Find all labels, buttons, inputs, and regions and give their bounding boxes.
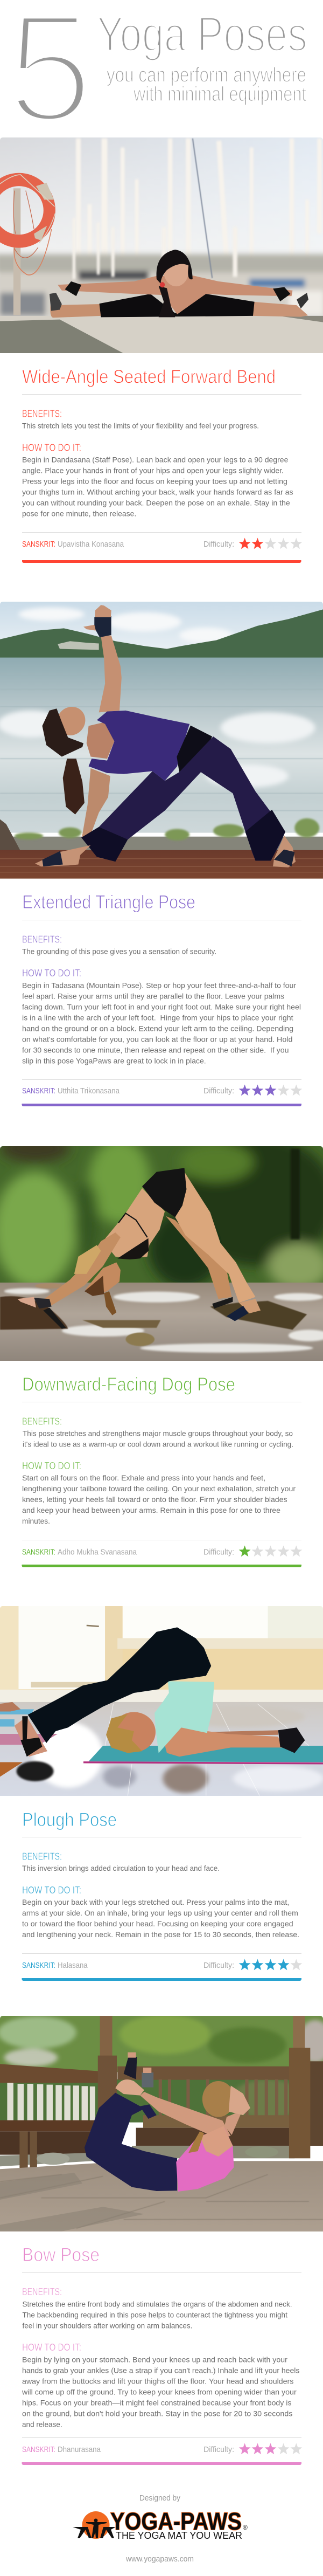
panel: downward-facing dog pose <box>0 1135 323 1567</box>
sanskrit name: Halasana <box>58 1961 88 1970</box>
pose title: Bow Pose <box>22 2244 100 2265</box>
yoga mats <box>0 1709 323 1776</box>
how to do it: and keep your head between your arms. Remain in this pose for one to three <box>22 1506 280 1514</box>
sanskrit name <box>22 2446 101 2454</box>
pose title: Wide-Angle Seated Forward Bend <box>22 367 276 388</box>
panel: plough pose <box>0 1603 323 1981</box>
railing left <box>0 2064 99 2170</box>
difficulty rating <box>203 538 302 549</box>
sanskrit name <box>22 1548 137 1556</box>
how to do it: for 30 seconds to one minute, then release and repeat on the other side. If you <box>22 1045 289 1054</box>
sanskrit name <box>22 1087 120 1096</box>
benefits <box>22 2286 292 2330</box>
benefits: it's ideal to use as a warm-up or cool down around a workout like running or cycling. <box>23 1439 293 1448</box>
sanskrit name: Utthita Trikonasana <box>58 1087 120 1096</box>
woman <box>85 2052 250 2192</box>
how to do it: Begin in Dandasana (Staff Pose). Lean back and open your legs to a 90 degree <box>22 455 289 464</box>
difficulty rating: Difficulty: <box>203 540 234 549</box>
woman <box>35 605 296 867</box>
subtitle <box>107 64 306 106</box>
how to do it: angle. Place your hands in front of your hips and open your legs slightly wider. <box>22 466 284 474</box>
how to do it: Begin on your back with your legs stretched out. Press your palms into the mat, <box>22 1898 289 1906</box>
hills <box>0 609 323 659</box>
benefits <box>22 1416 293 1448</box>
how to do it: Begin by lying on your stomach. Bend your knees up and reach back with your <box>22 2355 287 2364</box>
woman <box>50 250 308 318</box>
sanskrit name <box>22 540 124 549</box>
designed by: Designed by <box>139 2494 181 2503</box>
benefits <box>22 934 216 955</box>
sanskrit name: SANSKRIT: <box>22 1548 55 1556</box>
benefits: This inversion brings added circulation to your head and face. <box>22 1864 220 1872</box>
photo: downward dog in a river <box>0 1135 323 1361</box>
how to do it: HOW TO DO IT: <box>22 2342 81 2353</box>
photo: triangle pose by the sea <box>0 601 323 879</box>
logo: Yoga-Paws: ® <box>243 2524 248 2531</box>
how to do it <box>22 2342 299 2428</box>
benefits: This pose stretches and strengthens major muscle groups throughout your body, so <box>23 1429 293 1437</box>
how to do it: lengthening your tailbone toward the ceiling. On your next exhalation, stretch your <box>22 1484 296 1493</box>
background behind railing <box>0 2079 323 2123</box>
benefits: BENEFITS: <box>22 408 62 419</box>
railing right <box>117 2061 323 2158</box>
how to do it: you can without rounding your back. Deepen the pose on an exhale. Stay in the <box>22 498 290 507</box>
website: www.yogapaws.com <box>125 2555 194 2564</box>
photo: plough pose indoors <box>0 1603 323 1797</box>
how to do it: on the ground, but don't hold your breath. Stay in the pose for 20 to 30 seconds <box>22 2409 292 2417</box>
sanskrit name <box>22 1961 88 1970</box>
how to do it: your thighs turn in. Without arching your back, walk your hands forward as far as <box>22 487 293 496</box>
how to do it: pose for one minute, then release. <box>22 509 136 518</box>
woman <box>18 1168 261 1329</box>
how to do it: and release. <box>22 2420 62 2428</box>
color bar <box>22 2462 301 2465</box>
pose title: Plough Pose <box>22 1809 117 1830</box>
difficulty rating <box>203 1545 302 1556</box>
pose title: Extended Triangle Pose <box>22 892 195 913</box>
how to do it: feel apart. Raise your arms until they are parallel to the floor. Leave your palms <box>22 991 284 1000</box>
color bar <box>22 1978 301 1981</box>
photo: wide-angle pose on marina dock <box>0 136 323 354</box>
sanskrit name: SANSKRIT: <box>22 2446 55 2454</box>
color bar <box>22 1565 301 1567</box>
difficulty rating <box>203 1085 302 1096</box>
how to do it: hands to grab your ankles (Use a strap if you can't reach.) Inhale and lift your heels <box>22 2366 299 2374</box>
color bar <box>22 1104 301 1106</box>
benefits: BENEFITS: <box>22 1851 62 1862</box>
logo: Yoga-Paws <box>73 2508 248 2541</box>
how to do it: will come up off the ground. Try to keep your knees from opening wider than your <box>22 2387 297 2396</box>
difficulty rating: Difficulty: <box>203 1961 234 1970</box>
panel: extended triangle pose <box>0 601 323 1106</box>
how to do it: is in a line with the arch of your left foot. Hinge from your hips to place your right <box>22 1013 293 1022</box>
sanskrit name: Dhanurasana <box>58 2446 101 2454</box>
pose title: Downward-Facing Dog Pose <box>22 1374 235 1395</box>
difficulty rating: Difficulty: <box>203 2446 234 2454</box>
how to do it: facing down. Turn your left foot in and your right foot out. Make sure your right heel <box>22 1002 301 1011</box>
how to do it: on what's comfortable for you, you can look at the floor or up at your hand. Hold <box>22 1035 292 1043</box>
difficulty rating <box>203 1959 302 1970</box>
floor <box>0 1702 323 1797</box>
how to do it <box>22 1461 296 1525</box>
logo: Yoga-Paws: YOGA-PAWS <box>110 2508 242 2535</box>
sanskrit name: SANSKRIT: <box>22 1087 55 1096</box>
how to do it: Press your legs into the floor and focus on keeping your toes up and not letting <box>22 477 287 485</box>
how to do it: slip in this pose YogaPaws are great to lock in in place. <box>22 1056 206 1065</box>
benefits: This stretch lets you test the limits of your flexibility and feel your progress. <box>22 421 259 430</box>
sanskrit name: SANSKRIT: <box>22 1961 55 1970</box>
difficulty rating <box>203 2443 302 2454</box>
color bar <box>22 560 301 563</box>
benefits <box>22 408 259 430</box>
logo: Yoga-Paws: THE YOGA MAT YOU WEAR <box>116 2530 242 2541</box>
benefits: feel in your shoulders after working on arm balances. <box>23 2321 192 2330</box>
benefits <box>22 1851 220 1872</box>
benefits: BENEFITS: <box>22 934 62 945</box>
difficulty rating: Difficulty: <box>203 1087 234 1096</box>
footer <box>73 2494 248 2564</box>
deck floor <box>0 2161 323 2232</box>
sanskrit name: SANSKRIT: <box>22 540 55 549</box>
icon: life ring <box>0 175 55 315</box>
ground <box>0 316 323 354</box>
how to do it: to or toward the floor behind your head. Focusing on keeping your core engaged <box>22 1919 293 1928</box>
shore <box>12 837 323 851</box>
benefits: The grounding of this pose gives you a sensation of security. <box>22 947 216 955</box>
how to do it: HOW TO DO IT: <box>22 442 81 453</box>
how to do it: and lengthening your neck. Remain in the pose for 15 to 30 seconds, then release. <box>22 1930 299 1939</box>
panel: bow pose <box>0 2015 323 2465</box>
how to do it: Begin in Tadasana (Mountain Pose). Step or hop your feet three-and-a-half to four <box>22 981 296 989</box>
woman <box>0 1627 305 1757</box>
benefits: The backbending required in this pose helps to counteract the tightness you might <box>23 2310 287 2319</box>
how to do it: HOW TO DO IT: <box>22 968 81 979</box>
how to do it <box>22 1885 299 1939</box>
benefits: BENEFITS: <box>22 1416 62 1427</box>
how to do it: arms at your side. On an inhale, bring your legs up using your center and roll them <box>22 1909 298 1917</box>
benefits: Stretches the entire front body and stimulates the organs of the abdomen and neck. <box>23 2299 292 2308</box>
how to do it: away from the buttocks and lift your thighs off the floor. Your head and shoulders <box>22 2377 293 2385</box>
benefits: BENEFITS: <box>22 2286 62 2297</box>
how to do it <box>22 442 293 518</box>
how to do it: minutes. <box>22 1517 50 1525</box>
how to do it: hips. Focus on your breath—it might feel constrained because your front body is <box>22 2398 292 2407</box>
posts <box>100 2016 113 2057</box>
sanskrit name: Upavistha Konasana <box>58 540 124 549</box>
how to do it: hand on the ground or on a block. Extend your left arm to the ceiling. Depending <box>22 1024 293 1032</box>
how to do it: knees, letting your heels fall toward or onto the floor. Firm your shoulder blades <box>22 1495 287 1504</box>
photo: bow pose in a gazebo <box>0 2015 323 2232</box>
how to do it: HOW TO DO IT: <box>22 1461 81 1471</box>
difficulty rating: Difficulty: <box>203 1548 234 1556</box>
how to do it <box>22 968 301 1065</box>
how to do it: Start on all fours on the floor. Exhale and press into your hands and feet, <box>22 1473 265 1482</box>
panel: wide-angle seated forward bend <box>0 136 323 563</box>
how to do it: HOW TO DO IT: <box>22 1885 81 1896</box>
title <box>7 0 307 155</box>
sanskrit name: Adho Mukha Svanasana <box>58 1548 137 1556</box>
